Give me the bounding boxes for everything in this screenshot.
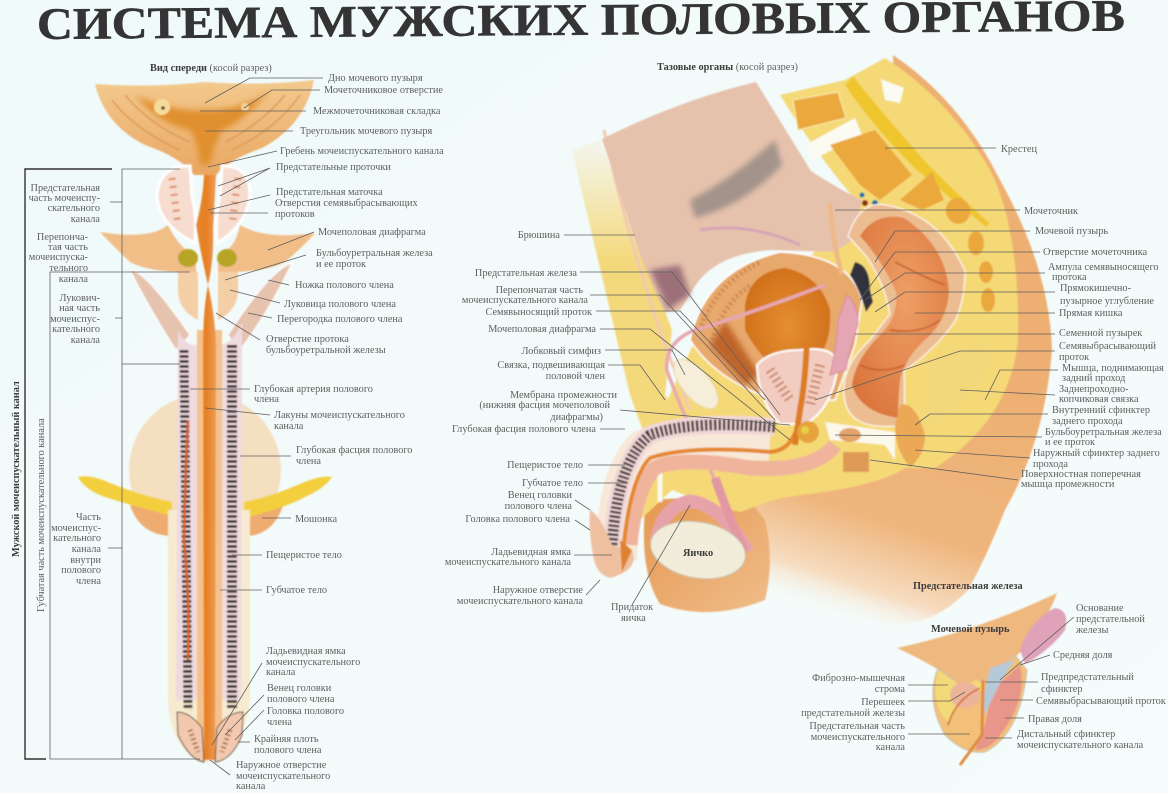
- labels: urethra sections left column: члена: [76, 576, 101, 587]
- crura of penis: [130, 263, 292, 350]
- labels: front view right column: Мошонка: [295, 514, 337, 525]
- buttock and thigh: [740, 55, 1052, 625]
- labels: front view right column: Крайняя плоть: [254, 734, 319, 745]
- labels: urethra sections left column: Часть: [76, 512, 101, 523]
- labels: pelvic right column: Семенной пузырек: [1059, 328, 1143, 339]
- labels: urethra sections left column: тельного: [49, 263, 88, 274]
- labels: prostate inset: Дистальный сфинктер: [1017, 729, 1115, 740]
- labels: prostate inset: строма: [875, 684, 905, 695]
- labels: urethra sections left column: мочеиспус-: [51, 523, 102, 534]
- labels: front view right column: Треугольник мочевого пузыря: [300, 126, 432, 137]
- brackets for urethra sections: [25, 169, 200, 759]
- labels: front view right column: Мочеточниковое отверстие: [324, 85, 443, 96]
- labels: pelvic right column: Мышца, поднимающая: [1062, 363, 1164, 374]
- white fascia gap beside scrotum: [658, 466, 662, 502]
- labels: front view right column: члена: [254, 394, 279, 405]
- labels: pelvic left column: мочеиспускательного канала: [462, 295, 588, 306]
- labels: front view right column: мочеиспускательного: [236, 771, 330, 782]
- penis sagittal: [612, 407, 835, 565]
- labels: prostate inset: сфинктер: [1041, 684, 1082, 695]
- labels: front view right column: полового члена: [254, 745, 322, 756]
- labels: pelvic right column: Отверстие мочеточника: [1043, 247, 1148, 258]
- labels: pelvic right column: Крестец: [1001, 144, 1037, 155]
- urogenital diaphragm: [100, 225, 315, 272]
- labels: front view right column: Отверстие протока: [266, 334, 349, 345]
- inset seminal vesicle: [1020, 608, 1066, 664]
- labels: front view right column: Губчатое тело: [266, 585, 327, 596]
- labels: pelvic right column: протока: [1052, 272, 1087, 283]
- labels: front view right column: [236, 73, 444, 792]
- inset bladder: [897, 593, 1057, 700]
- labels: urethra sections left column: [29, 183, 102, 587]
- labels: urethra sections left column: тая часть: [48, 242, 88, 253]
- labels: front view right column: Наружное отверстие: [236, 760, 327, 771]
- labels: front view right column: Бульбоуретральная железа: [316, 248, 433, 259]
- labels: pelvic left column: Связка, подвешивающая: [497, 360, 605, 371]
- labels: prostate inset: Основание: [1076, 603, 1124, 614]
- labels: pelvic left column: Семявыносящий проток: [485, 307, 593, 318]
- labels: pelvic left column: Мембрана промежности: [510, 390, 617, 401]
- labels: front view right column: Ножка полового члена: [295, 280, 394, 291]
- labels: pelvic right column: Семявыбрасывающий: [1059, 341, 1156, 352]
- label: epididymis: яичка: [621, 613, 646, 624]
- heading: prostate inset: Предстательная железа: [913, 581, 1023, 592]
- pubic symphysis: [666, 352, 726, 416]
- labels: pelvic right column: Мочевой пузырь: [1035, 226, 1108, 237]
- labels: urethra sections left column: канала: [59, 274, 88, 285]
- labels: prostate inset: мочеиспускательного канала: [1017, 740, 1144, 751]
- labels: pelvic left column: диафрагмы): [550, 412, 603, 423]
- labels: front view right column: Гребень мочеиспускательного канала: [280, 146, 444, 157]
- scrotum skin: [644, 495, 770, 612]
- labels: front view right column: члена: [296, 456, 321, 467]
- labels: front view right column: Глубокая фасция полового: [296, 445, 412, 456]
- prostate: [757, 349, 838, 424]
- bulb of penis: [178, 272, 238, 320]
- labels: urethra sections left column: внутри: [70, 555, 101, 566]
- vertical label: male urethra: Мужской мочеиспускательный канал: [11, 381, 22, 557]
- labels: prostate inset: железы: [1075, 625, 1108, 636]
- labels: pelvic right column: мышца промежности: [1021, 479, 1115, 490]
- vas deferens and epididymis: [656, 285, 825, 552]
- pelvic leader lines: [564, 148, 1058, 605]
- bladder: [690, 252, 862, 400]
- labels: prostate inset: Фиброзно-мышечная: [812, 673, 905, 684]
- vertical label: spongy urethra: Губчатая часть мочеиспускательного канала: [36, 418, 47, 612]
- labels: prostate inset: мочеиспускательного: [811, 732, 905, 743]
- label: bladder in inset: Мочевой пузырь: [931, 624, 1010, 635]
- labels: front view right column: Дно мочевого пузыря: [328, 73, 423, 84]
- inset leader lines: [908, 617, 1074, 738]
- rectum: [844, 204, 965, 426]
- labels: pelvic right column: и ее проток: [1045, 437, 1096, 448]
- labels: front view right column: Отверстия семявыбрасывающих: [275, 198, 419, 209]
- labels: pelvic left column: Глубокая фасция полового члена: [452, 424, 596, 435]
- labels: front view right column: Перегородка полового члена: [277, 314, 403, 325]
- labels: urethra sections left column: канала: [71, 335, 100, 346]
- glans sagittal: [590, 510, 634, 578]
- labels: prostate inset: Семявыбрасывающий проток: [1036, 696, 1167, 707]
- labels: prostate inset: предстательной железы: [801, 708, 905, 719]
- labels: pelvic left column: [445, 230, 617, 607]
- labels: prostate inset: [801, 603, 1167, 753]
- labels: urethra sections left column: Лукович-: [60, 293, 101, 304]
- labels: urethra sections left column: мочеиспуска-: [29, 252, 89, 263]
- prostate lobes: [157, 166, 250, 243]
- labels: pelvic right column: Бульбоуретральная железа: [1045, 427, 1162, 438]
- labels: urethra sections left column: полового: [61, 565, 101, 576]
- labels: pelvic left column: мочеиспускательного канала: [445, 557, 571, 568]
- labels: front view right column: Ладьевидная ямка: [266, 646, 346, 657]
- urethra inside prostate: [795, 340, 807, 445]
- heading: front view: Вид спереди (косой разрез): [150, 63, 272, 74]
- labels: pelvic right column: Мочеточник: [1024, 206, 1079, 217]
- labels: prostate inset: Предпредстательный: [1041, 672, 1134, 683]
- labels: urethra sections left column: канала: [71, 214, 100, 225]
- labels: pelvic left column: Перепончатая часть: [496, 285, 583, 296]
- label: testis: Яичко: [683, 548, 713, 559]
- labels: urethra sections left column: кательного: [53, 533, 101, 544]
- labels: front view right column: мочеиспускательного: [266, 657, 360, 668]
- panel: pelvic organs illustration: [572, 55, 1052, 625]
- labels: front view right column: члена: [267, 717, 292, 728]
- labels: pelvic right column: Внутренний сфинктер: [1052, 405, 1150, 416]
- labels: front view right column: Мочеполовая диафрагма: [318, 227, 426, 238]
- bladder: [95, 80, 314, 175]
- inset prostate body: [933, 655, 1027, 765]
- sacrum with vertebrae: [793, 79, 995, 312]
- labels: front view right column: Луковица полового члена: [284, 299, 396, 310]
- labels: pelvic left column: Венец головки: [508, 490, 572, 501]
- bulb and perineal muscles: [797, 421, 895, 472]
- labels: pelvic right column: пузырное углубление: [1060, 296, 1154, 307]
- labels: front view right column: Предстательные проточки: [276, 162, 391, 173]
- labels: pelvic right column: Прямая кишка: [1059, 308, 1123, 319]
- labels: pelvic right column: копчиковая связка: [1059, 394, 1139, 405]
- labels: front view right column: Предстательная маточка: [276, 187, 383, 198]
- labels: pelvic right column: задний проход: [1062, 373, 1125, 384]
- labels: front view right column: Венец головки: [267, 683, 332, 694]
- labels: front view right column: бульбоуретральной железы: [266, 345, 386, 356]
- ureter: [830, 203, 842, 275]
- labels: pelvic left column: Брюшина: [518, 230, 560, 241]
- labels: front view right column: протоков: [275, 209, 315, 220]
- rectovesical pouch: [850, 262, 873, 312]
- labels: pelvic left column: Головка полового члена: [465, 514, 570, 525]
- labels: front view right column: канала: [266, 667, 296, 678]
- labels: pelvic left column: Губчатое тело: [522, 478, 583, 489]
- panel: prostate inset: [897, 593, 1066, 765]
- labels: pelvic right column: Прямокишечно-: [1060, 283, 1132, 294]
- labels: prostate inset: предстательной: [1076, 614, 1145, 625]
- labels: front view right column: и ее проток: [316, 259, 367, 270]
- labels: urethra sections left column: Предстательная: [31, 183, 100, 194]
- labels: pelvic right column: [1001, 144, 1164, 490]
- labels: prostate inset: Предстательная часть: [809, 721, 905, 732]
- labels: prostate inset: Правая доля: [1028, 714, 1082, 725]
- labels: pelvic left column: половой член: [546, 371, 605, 382]
- peritoneum: [602, 82, 862, 312]
- labels: prostate inset: Средняя доля: [1053, 650, 1113, 661]
- labels: pelvic right column: Наружный сфинктер заднего: [1033, 448, 1160, 459]
- heading: pelvic organs: Тазовые органы (косой разрез): [657, 62, 798, 73]
- labels: prostate inset: Перешеек: [861, 697, 906, 708]
- labels: pelvic left column: (нижняя фасция мочеполовой: [479, 400, 610, 411]
- labels: pelvic right column: проток: [1059, 352, 1090, 363]
- labels: urethra sections left column: скательного: [48, 203, 100, 214]
- labels: pelvic left column: мочеиспускательного канала: [457, 596, 583, 607]
- penis shaft: [168, 175, 250, 763]
- labels: front view right column: Межмочеточниковая складка: [313, 106, 441, 117]
- labels: front view right column: канала: [236, 781, 266, 792]
- labels: pelvic left column: Пещеристое тело: [507, 460, 583, 471]
- front view leader lines: [190, 78, 323, 775]
- scrotum: [78, 394, 332, 546]
- labels: pelvic right column: заднего прохода: [1052, 416, 1123, 427]
- labels: front view right column: Головка полового: [267, 706, 344, 717]
- label: epididymis: Придаток: [611, 602, 653, 613]
- labels: pelvic right column: прохода: [1033, 459, 1068, 470]
- labels: front view right column: Пещеристое тело: [266, 550, 342, 561]
- abdominal wall: [572, 140, 690, 450]
- bulbourethral glands: [178, 249, 237, 267]
- labels: pelvic left column: Лобковый симфиз: [522, 346, 601, 357]
- labels: urethra sections left column: ная часть: [59, 303, 100, 314]
- labels: pelvic right column: Поверхностная поперечная: [1021, 469, 1141, 480]
- yellow pelvic fat: [610, 58, 1018, 520]
- labels: urethra sections left column: кательного: [52, 324, 100, 335]
- labels: pelvic left column: Наружное отверстие: [493, 585, 583, 596]
- panel: front view illustration: [78, 80, 332, 763]
- labels: front view right column: Глубокая артерия полового: [254, 384, 373, 395]
- labels: pelvic right column: Заднепроходно-: [1059, 384, 1129, 395]
- labels: front view right column: Лакуны мочеиспускательного: [274, 410, 405, 421]
- labels: pelvic left column: Ладьевидная ямка: [491, 547, 571, 558]
- labels: urethra sections left column: Перепонча-: [37, 232, 89, 243]
- seminal vesicle: [830, 295, 858, 375]
- glans: [177, 712, 243, 762]
- labels: pelvic left column: Предстательная железа: [475, 268, 577, 279]
- testis: [646, 514, 750, 586]
- labels: urethra sections left column: мочеиспус-: [50, 314, 101, 325]
- labels: urethra sections left column: канала: [72, 544, 101, 555]
- anal canal: [895, 404, 925, 467]
- labels: urethra sections left column: часть мочеиспу-: [29, 193, 101, 204]
- labels: front view right column: канала: [274, 421, 304, 432]
- labels: prostate inset: канала: [876, 742, 905, 753]
- labels: pelvic left column: полового члена: [505, 501, 572, 512]
- labels: front view right column: полового члена: [267, 694, 335, 705]
- labels: pelvic right column: Ампула семявыносящего: [1048, 262, 1159, 273]
- labels: pelvic left column: Мочеполовая диафрагма: [488, 324, 596, 335]
